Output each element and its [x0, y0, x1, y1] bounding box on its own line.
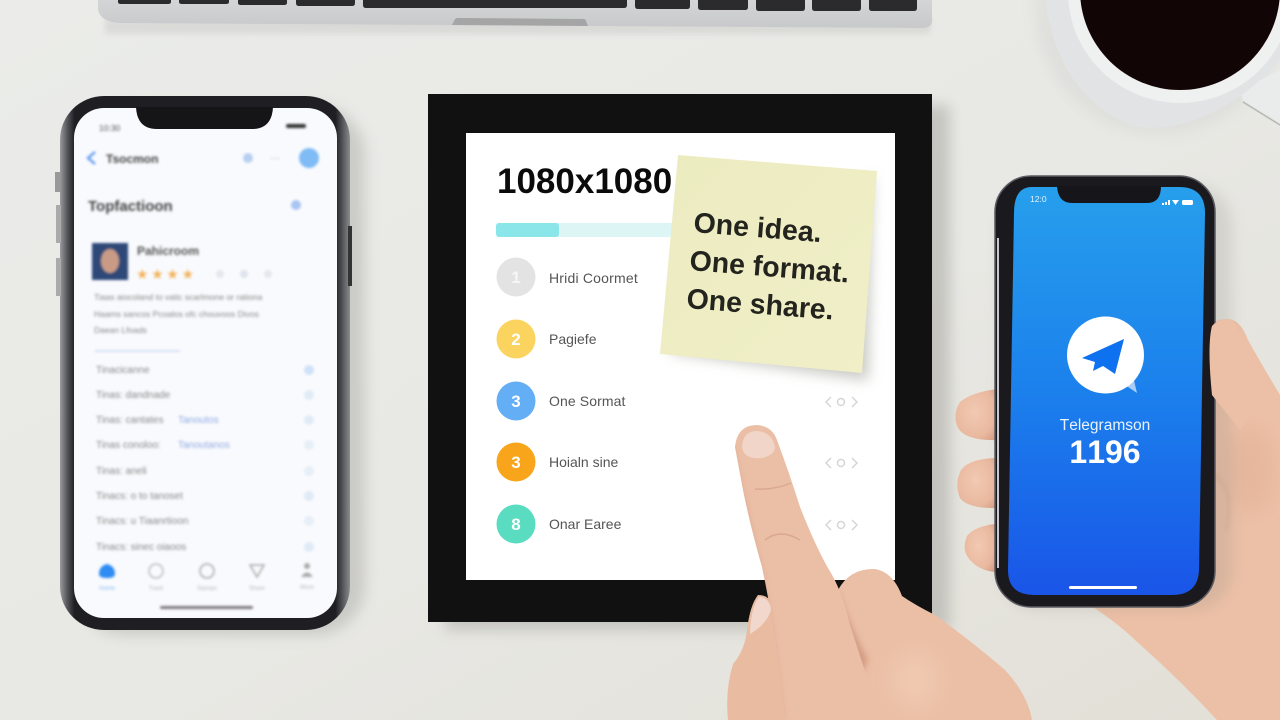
- sticky note text: [685, 207, 850, 327]
- description: Tiaas aiocoland to vatic scarlmone or rationa: [94, 292, 263, 302]
- step 1: Hridi Coormet: [549, 270, 638, 286]
- sticky note: [660, 155, 877, 380]
- step 3: 3: [511, 392, 521, 411]
- frame border: [428, 94, 932, 622]
- settings list: Tinacs: sinec oiaoos: [96, 542, 186, 553]
- hand highlight: [891, 652, 939, 708]
- listing thumbnail and stars: [92, 243, 272, 282]
- keyboard: [98, 0, 932, 34]
- app header: Tsocmon: [106, 152, 158, 166]
- home indicator: [1069, 586, 1137, 589]
- settings list: Tinacs: o to tanoset: [96, 491, 183, 502]
- thumb over phone edge: [1210, 319, 1262, 430]
- step 3: [496, 382, 625, 420]
- tab bar: More: [300, 585, 314, 591]
- right phone shadow: [1000, 185, 1232, 610]
- description: Daean Lfoads: [94, 325, 147, 335]
- tab bar: Track: [149, 586, 164, 592]
- listing thumbnail and stars: Pahicroom: [137, 244, 199, 258]
- listing thumbnail and stars: ★★★★: [136, 266, 197, 282]
- blurred app content: [88, 123, 319, 609]
- step 5: 8: [511, 515, 521, 534]
- description: Haams sancos Pcoalos ofc chouvoos Divos: [94, 309, 259, 319]
- blue divider: [95, 350, 180, 352]
- sticky note text: One share.: [685, 283, 835, 327]
- status bar: 10:30: [99, 123, 121, 133]
- settings list: Tinas: aneli: [96, 466, 147, 477]
- app header: [88, 148, 319, 168]
- step 1: 1: [511, 268, 521, 287]
- step 5: [496, 504, 622, 544]
- thumb: [727, 595, 790, 720]
- settings list: Tinacs: u Tiaanrtioon: [96, 516, 188, 527]
- index finger: [735, 425, 880, 720]
- status bar: 12:0: [1030, 194, 1047, 204]
- tab bar: Stamps: [197, 586, 217, 592]
- right hand fingers: [955, 389, 999, 572]
- settings list: Tinas: cantates: [96, 415, 163, 426]
- left phone shadow: [75, 105, 365, 635]
- step 4: Hoialn sine: [549, 454, 618, 470]
- row controls: [826, 397, 857, 530]
- blue screen: [1008, 187, 1205, 595]
- notch: [136, 107, 273, 129]
- section heading: [88, 198, 301, 215]
- thumbnail: [750, 597, 771, 634]
- pointing hand: [725, 425, 1032, 720]
- phone body: [995, 176, 1215, 607]
- step 4: 3: [511, 453, 521, 472]
- step 4: [496, 442, 618, 482]
- home indicator: [160, 606, 253, 609]
- index finger shading: [736, 450, 768, 597]
- size title: 1080x1080: [497, 162, 672, 201]
- status bar: [1030, 194, 1193, 205]
- tab bar: [99, 563, 314, 592]
- step 5: Onar Earee: [549, 516, 622, 532]
- tab bar: Share: [249, 586, 266, 592]
- section heading: Topfactioon: [88, 198, 173, 215]
- app name: Telegramson: [1060, 417, 1150, 434]
- left phone: [55, 96, 352, 630]
- sticky note text: One format.: [688, 245, 850, 290]
- right phone: [995, 176, 1215, 607]
- step 3: One Sormat: [549, 393, 625, 409]
- shadow between fingers: [800, 590, 868, 700]
- phone screen: [74, 108, 337, 618]
- settings list: Tinas conoloo:: [96, 440, 161, 451]
- joint creases: [755, 483, 800, 540]
- center frame: [428, 94, 932, 622]
- settings list: Tanoutanos: [178, 440, 230, 451]
- settings list: [96, 365, 314, 553]
- telegram icon: [1067, 316, 1144, 394]
- progress bar: [496, 223, 676, 237]
- settings list: Tanoutos: [178, 415, 219, 426]
- coffee cup: [1035, 0, 1280, 135]
- right hand back: [1090, 319, 1280, 720]
- settings list: Tinacicanne: [96, 365, 150, 376]
- step 2: [496, 320, 597, 358]
- white panel: [466, 133, 895, 580]
- description: [94, 292, 263, 335]
- settings list: Tinas: dandnade: [96, 390, 171, 401]
- tab bar: Home: [99, 586, 116, 592]
- step 2: Pagiefe: [549, 331, 597, 347]
- center frame shadow: [445, 105, 950, 630]
- step 1: [496, 258, 638, 296]
- sticky note text: One idea.: [692, 207, 823, 249]
- fingernail: [742, 431, 775, 458]
- knuckle fingers: [800, 569, 1032, 720]
- notch: [1057, 186, 1161, 203]
- phone body: [60, 96, 350, 630]
- app header: ···: [270, 153, 280, 164]
- step 2: 2: [511, 330, 521, 349]
- number: 1196: [1069, 434, 1141, 470]
